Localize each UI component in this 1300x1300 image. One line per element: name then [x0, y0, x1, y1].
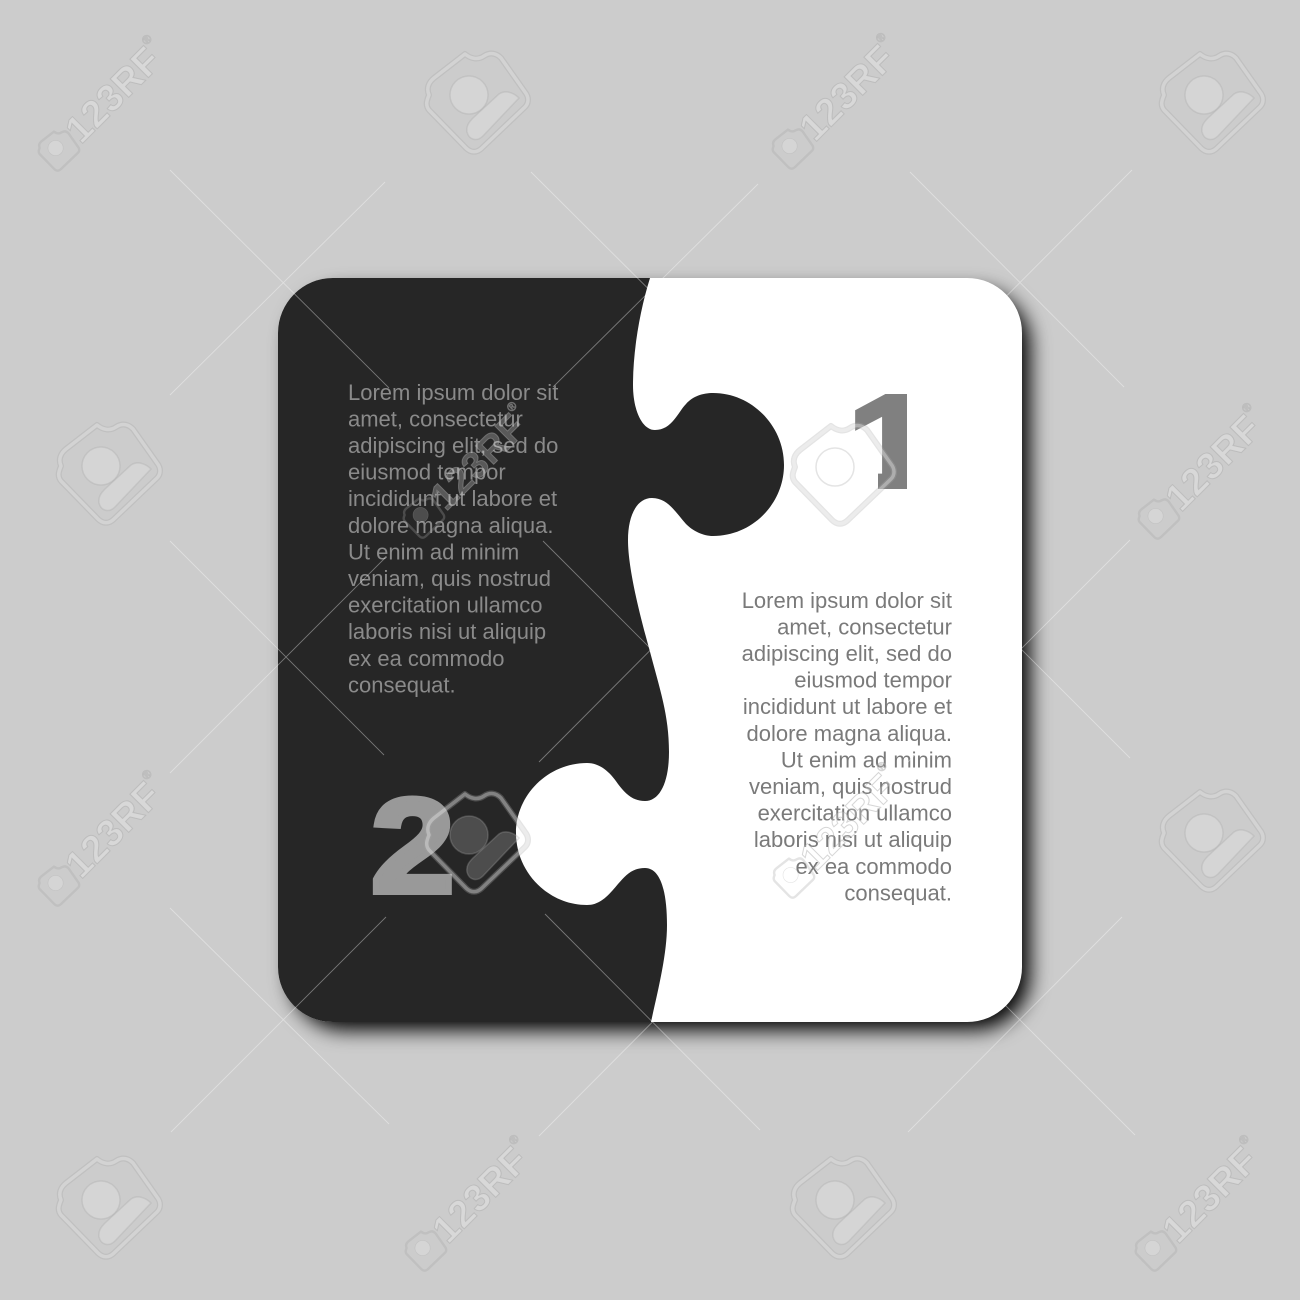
- watermark: 123RF logos: ®: [873, 29, 889, 46]
- text block: piece 1 description: adipiscing elit, sed do: [742, 641, 952, 666]
- text block: piece 1 description: consequat.: [844, 880, 952, 905]
- text block: piece 1 description: ex ea commodo: [795, 854, 952, 879]
- watermark: 123RF logos: 123RF: [58, 39, 170, 151]
- text block: piece 2 description: dolore magna aliqua.: [348, 513, 553, 538]
- text block: piece 2 description: adipiscing elit, sed do: [348, 433, 558, 458]
- watermark: 123RF logos: ®: [139, 766, 155, 783]
- text block: piece 1 description: amet, consectetur: [777, 614, 952, 640]
- text block: piece 2 description: exercitation ullamco: [348, 593, 542, 618]
- watermark: 123RF logos: 123RF: [423, 406, 535, 518]
- watermark: 123RF logos: 123RF: [1155, 1139, 1267, 1251]
- watermark: 123RF logos: 123RF: [792, 37, 904, 149]
- watermark: 123RF logos: ®: [139, 31, 155, 48]
- panel: white puzzle piece 1: [278, 278, 1022, 1022]
- text block: piece 2 description: Ut enim ad minim: [348, 539, 519, 564]
- text block: piece 2 description: Lorem ipsum dolor sit: [348, 380, 558, 405]
- text block: piece 1 description: incididunt ut labore et: [743, 694, 952, 719]
- text block: piece 2 description: veniam, quis nostrud: [348, 566, 551, 591]
- panel: dark puzzle piece 2: [278, 278, 784, 1022]
- watermark: 123RF logos: ®: [506, 1131, 522, 1148]
- text block: piece 2 description: incididunt ut labore et: [348, 486, 557, 511]
- text block: piece 2 description: amet, consectetur: [348, 406, 523, 432]
- text block: piece 1 description: dolore magna aliqua.: [747, 721, 952, 746]
- text block: piece 2 description: consequat.: [348, 672, 456, 697]
- card drop shadow: [290, 290, 1030, 1030]
- watermark: 123RF logos: 123RF: [425, 1139, 537, 1251]
- text block: piece 1 description: Lorem ipsum dolor sit: [742, 588, 952, 613]
- watermark: 123RF logos: 123RF: [58, 774, 170, 886]
- text block: piece 1 description: eiusmod tempor: [794, 668, 952, 693]
- text block: piece 2 description: eiusmod tempor: [348, 460, 506, 485]
- watermark: 123RF logos: ®: [874, 758, 890, 775]
- watermark: 123RF logos: ®: [1239, 399, 1255, 416]
- watermark: 123RF logos: 123RF: [793, 766, 905, 878]
- text block: piece 1 description: Ut enim ad minim: [781, 747, 952, 772]
- text block: piece 1 description: laboris nisi ut aliquip: [754, 827, 952, 852]
- number 2: 2: [371, 771, 454, 921]
- watermark: 123RF logos: ®: [504, 398, 520, 415]
- number 1: 1: [847, 367, 938, 519]
- watermark: 123RF logos: ®: [1236, 1131, 1252, 1148]
- watermark: 123RF logos: 123RF: [1158, 407, 1270, 519]
- text block: piece 1 description: exercitation ullamco: [758, 801, 952, 826]
- text block: piece 2 description: laboris nisi ut aliquip: [348, 619, 546, 644]
- text block: piece 1 description: veniam, quis nostrud: [749, 774, 952, 799]
- text block: piece 2 description: ex ea commodo: [348, 646, 505, 671]
